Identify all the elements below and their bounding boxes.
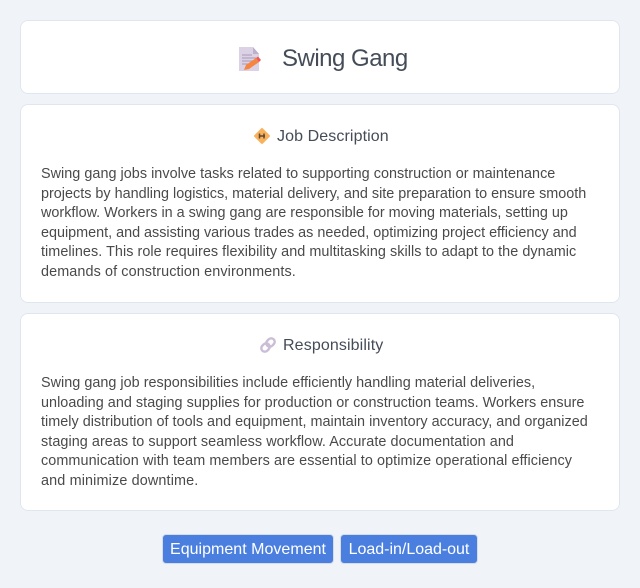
panel: job description — [20, 104, 620, 303]
text: job description body: equipment, and assisting various trades as needed, optimizing project efficiency and — [41, 225, 577, 241]
text: responsibility body: Swing gang job responsibilities include efficiently handling material deliveries, — [41, 375, 535, 391]
heading: Responsibility: Responsibility — [283, 337, 383, 354]
text: job description body: workflow. Workers in a swing gang are responsible for moving materials, setting up — [41, 205, 568, 221]
tag: Equipment Movement: Equipment Movement — [170, 541, 326, 558]
icon: document with pencil — [239, 47, 261, 71]
tag: Load-in/Load-out — [340, 534, 478, 564]
tag: Equipment Movement — [162, 534, 334, 564]
icon: orange diamond sign — [254, 128, 270, 144]
icon: chain link — [260, 337, 276, 353]
panel: title — [20, 20, 620, 94]
text: responsibility body: and minimize downtime. — [41, 473, 198, 489]
panel: responsibility — [20, 313, 620, 511]
heading: Swing Gang: Swing Gang — [282, 45, 408, 72]
text: job description body: Swing gang jobs involve tasks related to supporting construction or maintenance — [41, 166, 555, 182]
tag: Load-in/Load-out: Load-in/Load-out — [349, 541, 469, 558]
text: responsibility body: communication with team members are essential to optimize operational efficiency — [41, 453, 572, 469]
text: responsibility body: unloading and staging supplies for production or construction teams. Workers ensure — [41, 395, 584, 411]
text: responsibility body: timely distribution of tools and equipment, maintain inventory accuracy, and organized — [41, 414, 588, 430]
text: job description body — [41, 166, 586, 280]
heading: Job Description: Job Description — [277, 128, 389, 145]
text: responsibility body — [41, 375, 588, 489]
text: job description body: timelines. This role requires flexibility and multitasking skills to adapt to the dynamic — [41, 244, 576, 260]
text: responsibility body: staging areas to support seamless workflow. Accurate documentation and — [41, 434, 514, 450]
text: job description body: demands of construction environments. — [41, 264, 296, 280]
text: job description body: projects by handling logistics, material delivery, and site preparation to ensure smooth — [41, 186, 586, 202]
